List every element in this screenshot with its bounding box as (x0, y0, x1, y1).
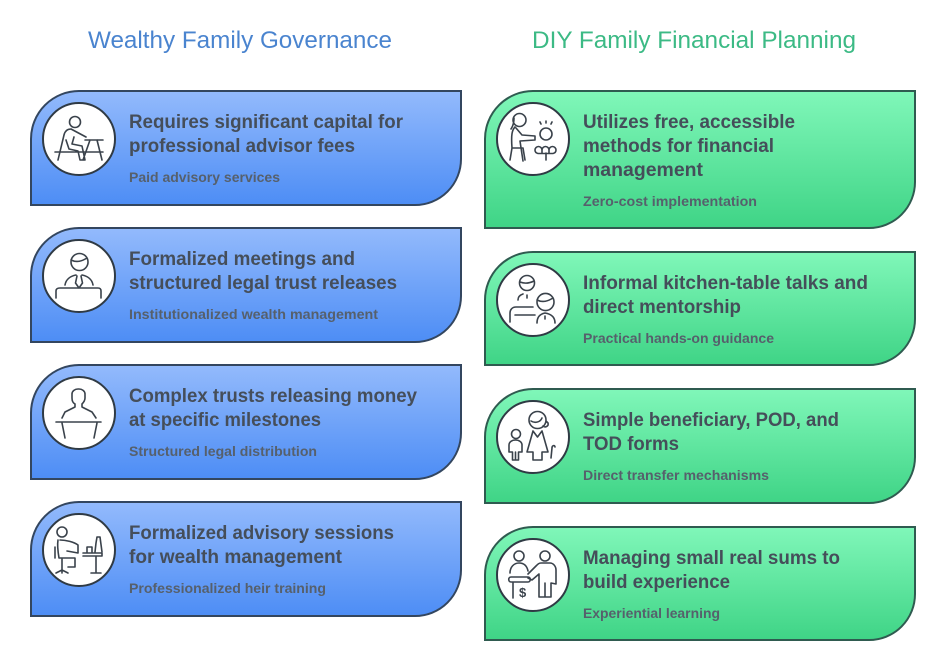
icon: adult teaching child (497, 103, 569, 175)
icon: person at lectern (43, 240, 115, 312)
title text: Managing small real sums to (583, 548, 840, 569)
title text line 2: methods for financial (583, 136, 774, 157)
title text: Complex trusts releasing money (129, 386, 417, 407)
subtitle: Paid advisory services (129, 169, 280, 185)
title text line 2: structured legal trust releases (129, 273, 397, 294)
icon: person seated at desk (43, 514, 115, 586)
icon: two people with money: $ (519, 585, 527, 600)
panel: advisory sessions (31, 502, 461, 616)
title text line 2: professional advisor fees (129, 136, 355, 157)
title text: Simple beneficiary, POD, and (583, 410, 839, 431)
icon: grandparent and child (497, 401, 569, 473)
subtitle: Institutionalized wealth management (129, 306, 378, 322)
panel: formalized meetings (31, 228, 461, 342)
subtitle: Professionalized heir training (129, 580, 326, 596)
title text: Utilizes free, accessible (583, 112, 795, 133)
panel: paid advisor fees (31, 91, 461, 205)
icon: two people at table (497, 264, 569, 336)
title text: Requires significant capital for (129, 112, 404, 133)
panel: small real sums (485, 527, 915, 640)
title text line 2: direct mentorship (583, 297, 741, 318)
subtitle: Practical hands-on guidance (583, 330, 774, 346)
title text line 2: at specific milestones (129, 410, 321, 431)
panel: kitchen-table talks (485, 252, 915, 365)
icon: person seated at table (43, 103, 115, 175)
title text line 2: for wealth management (129, 547, 343, 568)
panel: free methods (485, 91, 915, 228)
panel: beneficiary forms (485, 389, 915, 503)
subtitle: Zero-cost implementation (583, 193, 757, 209)
title text: Informal kitchen-table talks and (583, 273, 868, 294)
subtitle: Experiential learning (583, 605, 720, 621)
icon: two people with money (497, 539, 569, 611)
title text line 2: build experience (583, 572, 730, 593)
subtitle: Direct transfer mechanisms (583, 467, 769, 483)
heading: Wealthy Family Governance: Wealthy Family Governance (88, 27, 392, 54)
icon: speaker at podium (43, 377, 115, 449)
title text: Formalized advisory sessions (129, 523, 394, 544)
title text line 2: TOD forms (583, 434, 679, 455)
panel: complex trusts (31, 365, 461, 479)
heading: DIY Family Financial Planning: DIY Family Financial Planning (532, 27, 856, 54)
title text line 3: management (583, 160, 704, 181)
subtitle: Structured legal distribution (129, 443, 317, 459)
title text: Formalized meetings and (129, 249, 355, 270)
